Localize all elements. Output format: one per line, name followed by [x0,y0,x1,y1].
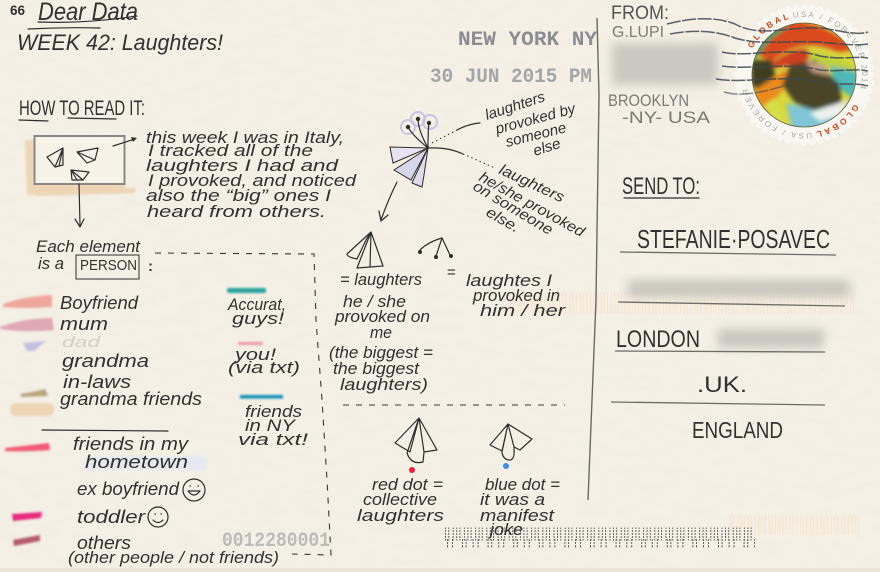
title: WEEK 42: Laughters! [17,30,223,55]
each element is a person: : [148,258,153,275]
legend: people left column: others [77,533,131,553]
send to heading: SEND TO: [622,173,700,200]
recipient city line: LONDON [616,326,700,353]
definition: laughters provoked on me: me [370,323,392,342]
postmark text: 30 JUN 2015 PM [430,66,592,89]
legend: people left column: ex boyfriend [77,479,180,499]
title: 66 [10,2,25,18]
recipient country: ENGLAND [692,417,783,443]
recipient city line [615,326,825,353]
recipient street line [618,280,850,306]
example flower glyph [390,112,463,187]
definition: laughters provoked on me: = laughters [340,270,422,289]
postcard divider [588,18,599,500]
legend: people left column: in-laws [63,372,131,392]
definition: laughters provoked on me: the biggest [333,359,420,378]
blue dot definition [480,475,560,539]
legend: people right column: friends [245,402,303,421]
legend: people right column: in NY [245,416,297,435]
legend: people right column: you! [234,345,276,364]
red dot definition: red dot = [372,475,443,494]
each element is a person [36,237,153,279]
legend: people right column: via txt! [238,430,308,449]
intro paragraph: laughters I had and [146,156,339,175]
postmark text: NEW YORK NY [458,29,597,52]
callout: laughters he or she provoked on someone else: he/she provoked [476,169,588,241]
callout: laughters provoked by someone else: provoked by [493,100,579,138]
legend: people left column: hometown [85,452,188,472]
key diagram card [25,136,137,196]
blue dot definition: it was a [480,490,545,509]
definition: laughters I provoked: = [447,264,456,281]
sender address: BROOKLYN [608,91,689,110]
sender address [608,3,718,127]
icon: smiling face [148,507,168,527]
legend: people left column: mum [60,314,108,334]
intro paragraph: I provoked, and noticed [148,171,357,190]
legend: people left column: Boyfriend [60,293,139,313]
legend: watercolor swatches [0,288,283,546]
callout: laughters he or she provoked on someone else: laughters [496,161,567,206]
definition: laughters I provoked [447,264,567,320]
legend: people left column [42,293,279,567]
callout: laughters he or she provoked on someone else [463,154,588,241]
callout: laughters provoked by someone else [432,88,579,160]
definition: laughters I provoked: provoked in [472,286,560,305]
definition: laughters provoked on me: laughters) [340,375,428,394]
definition: laughters provoked on me: (the biggest = [329,343,433,362]
definition: laughters I provoked: him / her [480,301,567,320]
red dot glyph [395,418,437,473]
how to read heading: HOW TO READ IT: [19,97,145,120]
callout: laughters he or she provoked on someone else: else. [483,204,523,236]
serial number: 0012280001 [222,530,330,553]
icon: stem glyph [418,238,453,259]
callout: laughters provoked by someone else: laughters [483,88,548,124]
dashed frame [155,253,331,555]
legend: people left column: (other people / not friends) [68,548,279,567]
definition: laughters I provoked: laughtes I [466,271,552,290]
legend: people left column: grandma friends [60,389,202,409]
blue dot definition: blue dot = [485,475,560,494]
red dot definition: laughters [357,506,445,525]
legend: people right column: (via txt) [228,358,300,377]
intro paragraph: heard from others. [147,202,326,221]
legend: people right column: guys! [232,309,284,328]
intro paragraph: also the “big” ones I [146,186,331,205]
postmark wavy cancel lines [667,19,868,94]
postmark text [430,29,597,89]
red dot definition: collective [363,490,437,509]
legend: people left column: dad [62,334,101,351]
stamp: USA / FOREVER 2014 [793,12,868,89]
stamp: GLOBAL [748,14,789,48]
legend: people left column: toddler [77,507,146,527]
title [10,0,223,55]
intro paragraph: this week I was in Italy, [146,128,344,147]
red dot definition [357,475,445,525]
arrow: flower to definitions [379,182,397,221]
definition: laughters provoked on me: provoked on [334,307,430,326]
sender address: -NY- USA [622,108,711,127]
barcode [445,530,755,544]
each element is a person: is a [38,254,64,273]
blue dot definition: joke [488,520,523,539]
each element is a person: PERSON [80,257,137,274]
intro paragraph: I tracked all of the [148,141,313,160]
sender address: FROM: [611,3,669,24]
definition: laughters provoked on me: he / she [343,292,406,311]
icon: laughing face [183,479,205,501]
each element is a person: Each element [36,237,141,256]
stamp [734,4,874,146]
stamp: USA / FOREVER [742,88,812,138]
intro paragraph [146,128,357,221]
definition: laughters provoked on me [329,270,433,394]
legend: people right column [227,295,308,449]
recipient country: .UK. [697,372,747,397]
legend: people right column: Accurat, [227,295,286,314]
blue dot definition: manifest [480,506,555,525]
blue dot glyph [490,424,532,469]
callout: laughters provoked by someone else: someone [504,119,568,151]
send to heading [622,173,700,200]
dashed separator [343,404,565,406]
legend: people left column: friends in my [73,434,189,454]
how to read heading [19,97,145,121]
callout: laughters he or she provoked on someone else: on someone [470,178,556,239]
legend: people left column: grandma [62,351,149,371]
callout: laughters provoked by someone else: else [531,135,563,160]
sender address: G.LUPI [612,24,664,41]
stamp: GLOBAL [816,105,858,137]
arrow: key to each element [75,184,84,227]
orange ghost barcodes [510,303,860,525]
icon: petal glyph [347,232,383,268]
recipient country [611,372,825,443]
